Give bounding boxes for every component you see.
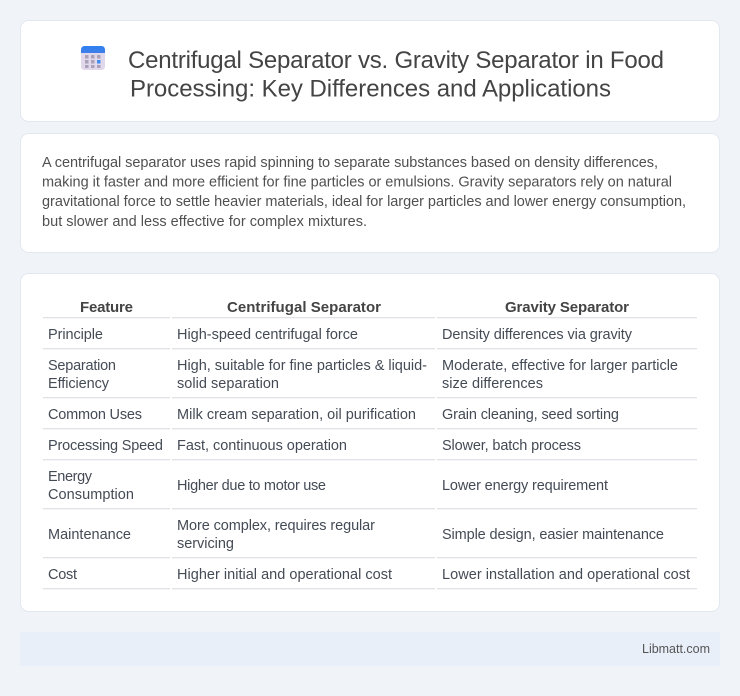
row: cost: Lower installation and operational cost: [442, 567, 690, 583]
row: processing speed: Slower, batch process: [442, 438, 581, 454]
row: common uses: Milk cream separation, oil purification: [177, 407, 416, 423]
row: principle: Density differences via gravity: [442, 327, 633, 343]
row: processing speed: Fast, continuous operation: [177, 438, 347, 454]
row: maintenance: servicing: [177, 536, 234, 552]
title: [128, 47, 664, 102]
row: processing speed: Processing Speed: [48, 438, 163, 454]
table header row: Centrifugal Separator: [227, 299, 381, 316]
text block: summary: but slower and less effective for complex mixtures.: [42, 214, 367, 230]
footer credit: Libmatt.com: [642, 642, 710, 656]
row: cost: Higher initial and operational cost: [177, 567, 392, 583]
row: separation efficiency: size differences: [442, 376, 543, 392]
table header row: Feature: [80, 299, 133, 316]
row: energy consumption: Consumption: [48, 487, 134, 503]
text block: summary: A centrifugal separator uses rapid spinning to separate substances based on density differences,: [42, 155, 658, 171]
text block: summary: [42, 155, 686, 230]
header panel: [20, 20, 720, 122]
row: energy consumption: [43, 469, 697, 509]
row: separation efficiency: [43, 358, 697, 398]
row: common uses: Grain cleaning, seed sorting: [442, 407, 619, 423]
title: Processing: Key Differences and Applications: [130, 76, 611, 102]
table header row: Gravity Separator: [505, 299, 629, 316]
text block: summary: making it faster and more efficient for fine particles or emulsions. Gravity separators rely on natural: [42, 174, 672, 190]
title: Centrifugal Separator vs. Gravity Separator in Food: [128, 47, 664, 74]
row: maintenance: [43, 518, 697, 558]
row: common uses: [43, 407, 697, 429]
text block: summary: gravitational force to settle heavier materials, ideal for larger particles and lower energy consumption,: [42, 194, 686, 210]
row: cost: [43, 567, 697, 589]
row: separation efficiency: Efficiency: [48, 376, 110, 392]
row: maintenance: More complex, requires regular: [177, 518, 375, 534]
table header row: [43, 299, 697, 318]
row: maintenance: Simple design, easier maintenance: [442, 527, 664, 543]
icon: calendar: [81, 46, 105, 70]
panel: summary paragraph: [20, 134, 720, 252]
row: energy consumption: Higher due to motor use: [177, 478, 326, 494]
row: separation efficiency: Separation: [48, 358, 116, 374]
row: maintenance: Maintenance: [48, 527, 131, 543]
row: energy consumption: Energy: [48, 469, 93, 485]
row: principle: Principle: [48, 327, 103, 343]
row: energy consumption: Lower energy requirement: [442, 478, 608, 494]
row: common uses: Common Uses: [48, 407, 142, 423]
row: separation efficiency: High, suitable for fine particles & liquid-: [177, 358, 427, 374]
row: separation efficiency: Moderate, effective for larger particle: [442, 358, 678, 374]
panel: comparison table: [20, 274, 720, 612]
row: principle: [43, 327, 697, 349]
row: principle: High-speed centrifugal force: [177, 327, 358, 343]
row: processing speed: [43, 438, 697, 460]
footer bar: [20, 632, 720, 666]
row: separation efficiency: solid separation: [177, 376, 279, 392]
row: cost: Cost: [48, 567, 77, 583]
